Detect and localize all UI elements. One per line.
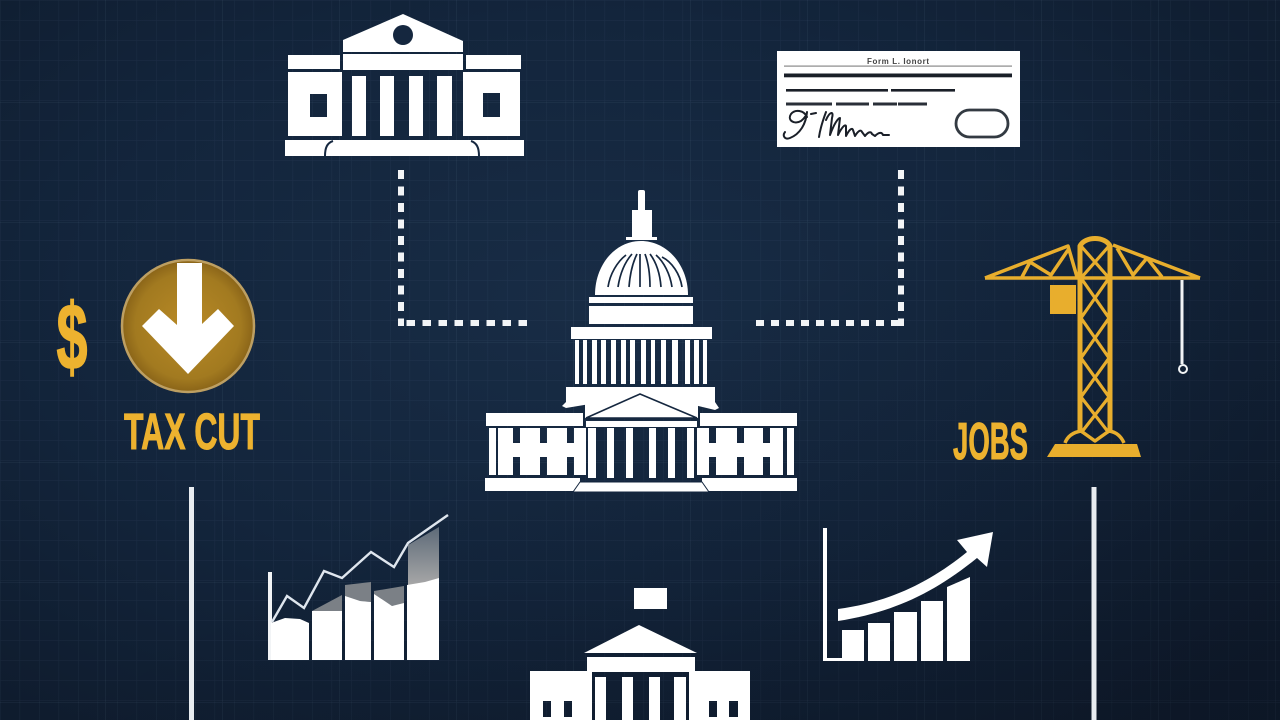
icon: bank check top right	[777, 51, 1020, 147]
vertical line right	[1092, 487, 1096, 720]
chart: area bars with line	[268, 515, 448, 660]
icon: construction crane	[985, 238, 1200, 457]
label: jobs: JOBS	[953, 413, 1028, 471]
chart: rising bars with arrow	[823, 528, 993, 661]
label: tax cut: TAX CUT	[124, 403, 260, 460]
connector: dotted line from treasury to capitol	[398, 170, 527, 326]
amount box	[956, 110, 1008, 137]
check header text: Form L. Ionort	[867, 57, 929, 66]
vertical line left	[189, 487, 194, 720]
crane cable and hook	[1179, 280, 1187, 373]
signature scribble	[784, 111, 889, 139]
icon: gold coin with down arrow	[122, 260, 254, 392]
crane jib	[985, 245, 1200, 278]
connector: dotted line from check to capitol	[756, 170, 905, 326]
flag	[634, 588, 667, 609]
label: dollar sign: $	[56, 284, 88, 389]
icon: government building bottom	[530, 588, 750, 720]
icon: capitol building center	[485, 190, 797, 492]
crane base	[1047, 444, 1141, 457]
icon: treasury building top left	[285, 14, 524, 156]
crane counterweight	[1050, 285, 1076, 314]
growth arrow	[838, 532, 993, 621]
